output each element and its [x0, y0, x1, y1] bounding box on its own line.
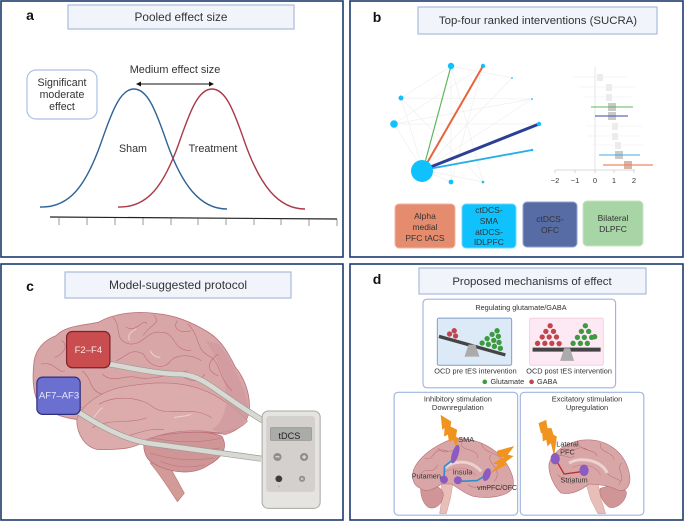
labels: lateral PFC, striatum — [556, 439, 588, 484]
subheading: regulating glutamate/GABA: Regulating glutamate/GABA — [475, 303, 567, 312]
heading c — [65, 272, 291, 298]
box: alpha medial PFC tACS: PFC tACS — [405, 233, 445, 243]
heading d: Proposed mechanisms of effect — [452, 276, 613, 288]
wire: AF7-AF3 — [78, 412, 261, 459]
panel: inhibitory stimulation — [394, 392, 518, 515]
subheading: inhibitory: Inhibitory stimulation — [424, 395, 492, 404]
panel c: model-suggested protocol — [1, 264, 343, 520]
labels: lateral PFC, striatum: Lateral — [556, 439, 579, 448]
box: ctDCS-SMA atDCS-lDLPFC — [462, 204, 516, 248]
axis — [50, 217, 337, 226]
scale: pre intervention — [437, 318, 512, 365]
subheading: excitatory: Excitatory stimulation — [552, 395, 622, 404]
heading b: Top-four ranked interventions (SUCRA) — [439, 15, 637, 27]
box: bilateral DLPFC — [583, 201, 643, 246]
callout: significant moderate effect — [27, 70, 97, 119]
panel d: proposed mechanisms of effect — [350, 264, 683, 520]
sagittal brain right — [549, 440, 630, 514]
tDCS device — [262, 411, 320, 508]
box: ctDCS-SMA atDCS-lDLPFC: atDCS- — [475, 227, 503, 237]
heading b — [418, 7, 657, 34]
callout: significant moderate effect: moderate — [40, 89, 84, 101]
forest plot: 0 — [593, 176, 597, 185]
arrow: effect distance — [136, 82, 214, 86]
legend: Glutamate — [491, 377, 524, 386]
electrode F2-F4 — [67, 331, 110, 368]
box: bilateral DLPFC: DLPFC — [599, 224, 627, 234]
box: ctDCS-SMA atDCS-lDLPFC: lDLPFC — [474, 237, 504, 247]
box: ctDCS-SMA atDCS-lDLPFC: SMA — [480, 216, 499, 226]
heading c: Model-suggested protocol — [109, 278, 247, 292]
labels: regions: Putamen — [412, 472, 441, 481]
legend — [482, 377, 557, 386]
box: alpha medial PFC tACS: medial — [412, 222, 438, 232]
caption: post: OCD post tES intervention — [526, 367, 612, 376]
panel label d: d — [373, 271, 381, 287]
labels: regions: Insula — [453, 468, 473, 477]
subheading: inhibitory — [424, 395, 492, 412]
legend: GABA — [537, 377, 557, 386]
subheading: excitatory — [552, 395, 622, 412]
box: ctDCS-OFC: OFC — [541, 225, 559, 235]
box: alpha medial PFC tACS — [395, 204, 455, 248]
label: sham: Sham — [119, 143, 147, 155]
curve: sham — [40, 89, 227, 209]
curve: treatment — [118, 89, 305, 209]
label: medium effect size: Medium effect size — [130, 64, 220, 76]
electrode AF7-AF3: AF7–AF3 — [39, 391, 79, 402]
box: bilateral DLPFC: Bilateral — [598, 213, 628, 223]
box: ctDCS-OFC: ctDCS- — [536, 214, 564, 224]
callout: significant moderate effect: effect — [49, 101, 75, 113]
callout: significant moderate effect: Significant — [38, 77, 86, 89]
illustration: brain with electrodes and tDCS device — [33, 312, 320, 508]
electrode AF7-AF3 — [37, 377, 80, 414]
icon: lightning SMA — [441, 415, 459, 449]
forest plot: 2 — [632, 176, 636, 185]
wire: F2-F4 — [109, 364, 263, 420]
icon: lightning lateral PFC — [539, 420, 557, 456]
electrode F2-F4: F2–F4 — [75, 345, 102, 356]
network plot — [390, 63, 541, 184]
panel b: top-four ranked interventions — [350, 1, 683, 257]
panel label a: a — [26, 7, 34, 23]
brain — [33, 312, 249, 502]
label: treatment: Treatment — [189, 143, 237, 155]
labels: lateral PFC, striatum: Striatum — [560, 475, 588, 484]
panel: excitatory stimulation — [520, 392, 644, 515]
forest plot — [551, 67, 653, 185]
panel a: pooled effect size — [1, 1, 343, 257]
forest plot: −2 — [551, 176, 559, 185]
labels: regions — [412, 435, 517, 492]
labels: lateral PFC, striatum: PFC — [560, 447, 575, 456]
scale: post intervention — [530, 318, 603, 365]
panel label c: c — [26, 278, 34, 294]
caption: pre: OCD pre tES intervention — [434, 367, 517, 376]
forest plot: −1 — [571, 176, 579, 185]
forest plot: 1 — [612, 176, 616, 185]
tDCS device: tDCS — [278, 431, 300, 441]
pathway: blue circuit — [440, 444, 492, 484]
subheading: inhibitory: Downregulation — [432, 403, 484, 412]
sagittal brain — [413, 439, 513, 514]
box: ctDCS-OFC — [523, 202, 577, 247]
pathway: red circuit — [551, 453, 589, 476]
panel label b: b — [373, 9, 381, 25]
labels: regions: SMA — [458, 435, 474, 444]
heading d — [419, 268, 646, 294]
box: ctDCS-SMA atDCS-lDLPFC: ctDCS- — [475, 205, 503, 215]
heading a — [68, 5, 294, 29]
labels: regions: vmPFC/OFC — [477, 485, 517, 492]
heading a: Pooled effect size — [135, 10, 228, 24]
subheading: excitatory: Upregulation — [566, 403, 608, 412]
box: alpha medial PFC tACS: Alpha — [414, 211, 436, 221]
panel: regulating glutamate/GABA — [423, 299, 616, 388]
icon: lightning vmPFC — [489, 446, 514, 474]
